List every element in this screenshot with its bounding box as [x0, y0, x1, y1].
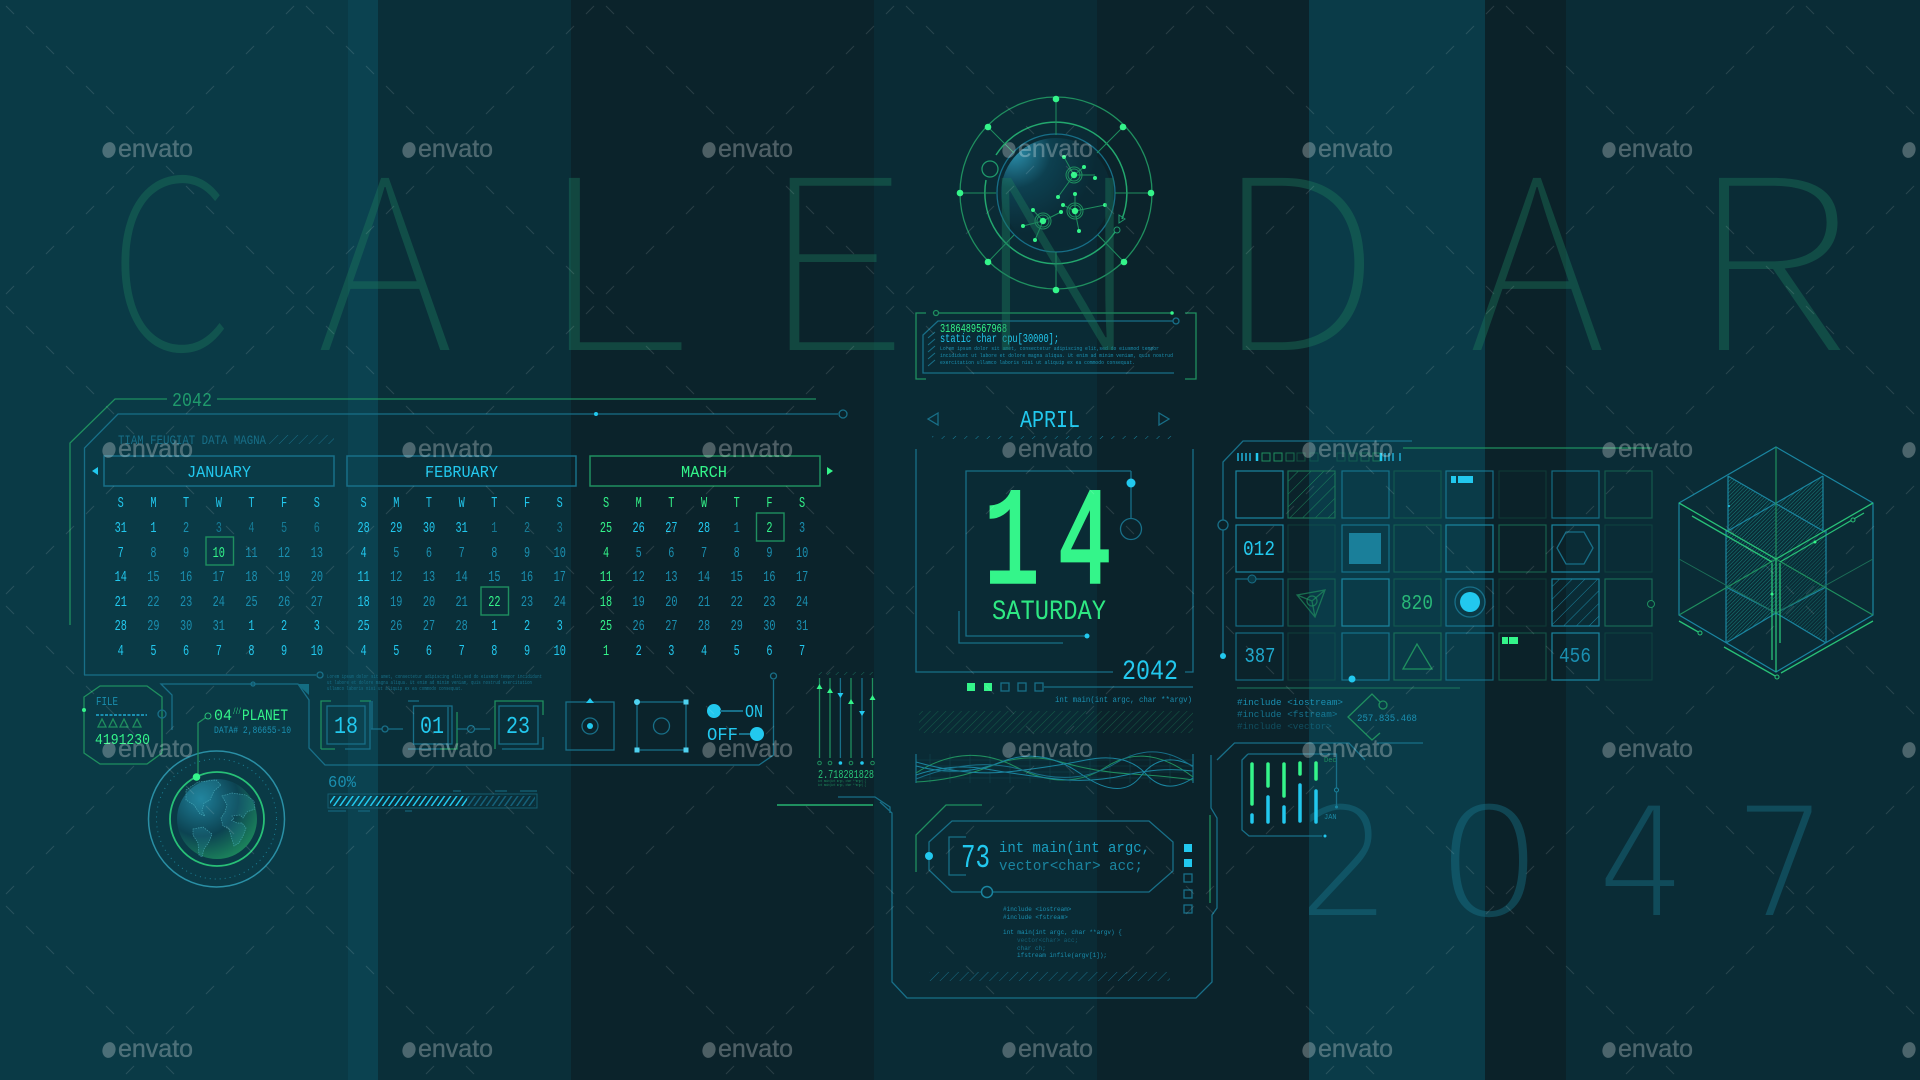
- month grid: March: 22: [731, 593, 743, 611]
- month grid: March: W: [701, 494, 707, 512]
- month grid: January: 29: [147, 617, 160, 635]
- month grid: March: [600, 494, 808, 660]
- code box: exercitation ullamco laboris nisi ut aliquip ex ea commodo consequat.: [940, 359, 1135, 366]
- month grid: February: 4: [361, 642, 367, 660]
- watermarks: envato: [1618, 1035, 1693, 1063]
- month grid: January: 26: [278, 593, 290, 611]
- month grid: March: S: [603, 494, 609, 512]
- watermarks: envato: [418, 135, 493, 163]
- watermarks: envato: [1618, 435, 1693, 463]
- watermarks: envato: [118, 135, 193, 163]
- calendar frame lines: [70, 399, 847, 678]
- month grid: February: 1: [491, 519, 498, 537]
- month grid: February: 28: [357, 519, 370, 537]
- on off toggles: [707, 703, 764, 746]
- month grid: February: 6: [426, 642, 432, 660]
- cube edges: [1679, 447, 1873, 672]
- month grid: March: 27: [665, 519, 678, 537]
- month grid: February: 7: [459, 544, 465, 562]
- watermarks: envato: [118, 1035, 193, 1063]
- month grid: January: 24: [213, 593, 225, 611]
- radar spokes and nodes: [957, 96, 1154, 293]
- counter 23: [495, 701, 543, 749]
- counter 01: [408, 701, 457, 749]
- on off toggles: OFF: [707, 726, 738, 746]
- month grid: March: 27: [665, 617, 678, 635]
- code box: incididunt ut labore et dolore magna aliqua. Ut enim ad minim veniam, quis nostrud: [940, 352, 1173, 359]
- month grid: February: 24: [554, 593, 566, 611]
- title: CALENDAR: L: [536, 75, 688, 419]
- month headers: [104, 456, 820, 486]
- weekday: SATURDAY: [992, 597, 1106, 628]
- month grid: March: M: [636, 494, 642, 512]
- vertical sliders: int main(int argc, char **argv) {: [818, 783, 866, 788]
- month grid: January: 25: [245, 593, 258, 611]
- grid icons: [1248, 476, 1654, 682]
- grid numbers: 012: [1243, 539, 1275, 562]
- month grid: January: T: [248, 494, 255, 512]
- month grid: January: S: [314, 494, 320, 512]
- month grid: March: 15: [731, 568, 743, 586]
- control strip frame: [161, 673, 776, 765]
- month headers: MARCH: [681, 464, 727, 483]
- month grid: March: 2: [766, 519, 773, 537]
- month grid: January: S: [118, 494, 124, 512]
- month grid: February: 12: [390, 568, 402, 586]
- ticker: [1238, 453, 1400, 461]
- watermarks: envato: [1018, 435, 1093, 463]
- progress bar: 60%: [328, 774, 357, 793]
- counter 18: [321, 701, 371, 749]
- title: CALENDAR: A: [1470, 75, 1604, 418]
- continents: [186, 780, 255, 857]
- month grid: March: 5: [734, 642, 740, 660]
- month grid: January: 31: [213, 617, 225, 635]
- target square 1: [566, 698, 614, 750]
- grid numbers: 820: [1401, 593, 1433, 616]
- month grid: February: 25: [357, 617, 370, 635]
- waveform: [916, 752, 1193, 789]
- counter 01: 01: [420, 714, 444, 741]
- watermarks: envato: [118, 735, 193, 763]
- month grid: January: 18: [245, 568, 258, 586]
- month grid: February: 19: [390, 593, 402, 611]
- month grid: March: 4: [603, 544, 609, 562]
- month grid: February: 10: [554, 642, 566, 660]
- accent line: [916, 805, 982, 872]
- month grid: January: T: [183, 494, 189, 512]
- watermarks: envato: [1018, 1035, 1093, 1063]
- title: CALENDAR: N: [976, 75, 1139, 418]
- month grid: February: 16: [521, 568, 533, 586]
- month grid: February: 20: [423, 593, 435, 611]
- month grid: March: 24: [796, 593, 808, 611]
- month grid: January: 20: [311, 568, 323, 586]
- month grid: January: 5: [150, 642, 156, 660]
- month grid: January: 2: [281, 617, 287, 635]
- month grid: February: 5: [393, 642, 399, 660]
- watermarks: envato: [1318, 1035, 1393, 1063]
- title: CALENDAR: D: [1215, 75, 1379, 418]
- month grid: February: 21: [456, 593, 468, 611]
- diamond readout: [1348, 694, 1417, 740]
- include lines: [1237, 697, 1343, 732]
- month grid: January: 22: [147, 593, 160, 611]
- grid panel: [1218, 441, 1654, 740]
- month grid: February: 17: [554, 568, 566, 586]
- month grid: February: 23: [521, 593, 533, 611]
- watermarks: envato: [1018, 735, 1093, 763]
- month grid: March: T: [668, 494, 675, 512]
- octagon: [925, 821, 1173, 898]
- month grid: January: 10: [213, 544, 225, 562]
- month grid: February: M: [393, 494, 399, 512]
- month arrows: [92, 467, 833, 475]
- month grid: March: 20: [665, 593, 678, 611]
- vertical sliders: 2.718281828: [818, 768, 874, 782]
- month grid: February: 9: [524, 642, 530, 660]
- month grid: February: 22: [488, 593, 500, 611]
- title: 2047: 0: [1436, 776, 1543, 951]
- planet label: DATA# 2,86655-10: [214, 726, 291, 737]
- month grid: February: 2: [524, 617, 530, 635]
- left connectors: [777, 804, 873, 806]
- month grid: March: S: [799, 494, 805, 512]
- code box: 3186489567968: [940, 322, 1007, 336]
- month grid: January: 11: [245, 544, 258, 562]
- month grid: March: 5: [636, 544, 642, 562]
- watermarks: envato: [1618, 735, 1693, 763]
- watermarks: envato: [1018, 135, 1093, 163]
- month grid: March: 6: [766, 642, 773, 660]
- month grid: February: T: [491, 494, 498, 512]
- month grid: January: 28: [115, 617, 127, 635]
- slider labels: JAN: [1324, 814, 1337, 822]
- top connector: [838, 797, 890, 813]
- code listing: #include <iostream>: [1003, 906, 1072, 913]
- month grid: February: 28: [456, 617, 468, 635]
- month grid: February: 9: [524, 544, 530, 562]
- month grid: March: 8: [734, 544, 740, 562]
- big day number: 1: [984, 469, 1039, 624]
- highlighted dates: [206, 513, 784, 615]
- month grid: March: T: [734, 494, 740, 512]
- month grid: March: 13: [665, 568, 678, 586]
- lorem text block: [327, 674, 542, 692]
- grid cells: [1236, 471, 1652, 680]
- month grid: February: 6: [426, 544, 432, 562]
- octagon: 73: [961, 840, 990, 877]
- month grid: March: 18: [600, 593, 612, 611]
- month grid: February: 3: [557, 617, 563, 635]
- file widget: 4191230: [95, 732, 150, 749]
- month headers: FEBRUARY: [425, 464, 498, 483]
- month grid: March: 28: [698, 519, 710, 537]
- title: 2047: 2: [1299, 776, 1391, 951]
- code listing: vector<char> acc;: [1017, 937, 1078, 944]
- include lines: #include <fstream>: [1237, 709, 1338, 720]
- month grid: January: W: [216, 494, 222, 512]
- title: CALENDAR: A: [318, 75, 452, 418]
- planet label: 04: [214, 707, 232, 725]
- watermarks: envato: [718, 1035, 793, 1063]
- title: 2047: [1299, 776, 1828, 951]
- vertical sliders: int main(int argc, char **argv) {: [818, 779, 866, 784]
- watermarks: [118, 135, 1693, 1063]
- code listing: char ch;: [1017, 945, 1046, 952]
- month grid: January: 30: [180, 617, 192, 635]
- month grid: March: 29: [731, 617, 743, 635]
- month grid: February: 8: [491, 544, 497, 562]
- month grid: March: 1: [734, 519, 740, 537]
- planet label: [214, 707, 291, 737]
- month grid: January: M: [150, 494, 156, 512]
- month grid: February: 26: [390, 617, 402, 635]
- month grid: February: 15: [488, 568, 500, 586]
- month grid: January: 2: [183, 519, 189, 537]
- code listing: int main(int argc, char **argv) {: [1003, 929, 1122, 936]
- month grid: February: 30: [423, 519, 435, 537]
- month grid: January: 15: [147, 568, 160, 586]
- month grid: March: 25: [600, 519, 612, 537]
- code listing: ifstream infile(argv[1]);: [1017, 952, 1107, 959]
- title: 2047: 7: [1735, 776, 1828, 951]
- month grid: January: 21: [115, 593, 127, 611]
- cube hatching: [1726, 476, 1826, 643]
- month grid: January: 9: [281, 642, 287, 660]
- month grid: March: 7: [701, 544, 707, 562]
- diamond readout: 257.835.468: [1357, 714, 1417, 725]
- date frame: [916, 449, 1193, 672]
- month grid: January: 14: [115, 568, 127, 586]
- month grid: January: 4: [118, 642, 124, 660]
- month grid: March: 3: [799, 519, 805, 537]
- month grid: February: F: [524, 494, 530, 512]
- month grid: February: 5: [393, 544, 399, 562]
- counter 23: 23: [506, 714, 530, 741]
- month grid: January: 16: [180, 568, 192, 586]
- month grid: January: [115, 494, 323, 660]
- globe sphere: [1001, 138, 1111, 248]
- month grid: January: 6: [183, 642, 189, 660]
- subtitle: TIAM FEUGIAT DATA MAGNA: [118, 433, 266, 448]
- isometric cube: [1679, 447, 1873, 679]
- watermarks: envato: [718, 735, 793, 763]
- lorem text block: Lorem ipsum dolor sit amet, consectetur adipiscing elit,sed do eiusmod tempor incididunt: [327, 674, 542, 680]
- month grid: March: 26: [633, 617, 645, 635]
- code listing: #include <fstream>: [1003, 914, 1068, 921]
- month grid: February: 18: [357, 593, 370, 611]
- month grid: March: 31: [796, 617, 808, 635]
- month grid: February: W: [459, 494, 465, 512]
- month grid: February: 3: [557, 519, 563, 537]
- month grid: February: 29: [390, 519, 402, 537]
- title: CALENDAR: E: [761, 75, 908, 418]
- counter 18: 18: [334, 714, 358, 741]
- month grid: March: 7: [799, 642, 805, 660]
- side accent: [1209, 815, 1211, 903]
- month grid: March: 19: [633, 593, 645, 611]
- month grid: February: S: [557, 494, 563, 512]
- month selector: APRIL: [1020, 408, 1080, 435]
- month grid: January: 8: [150, 544, 156, 562]
- month grid: February: 2: [524, 519, 530, 537]
- subtitle hatch: [269, 435, 334, 444]
- month grid: February: 8: [491, 642, 497, 660]
- month grid: January: 5: [281, 519, 287, 537]
- month grid: January: 8: [248, 642, 255, 660]
- month grid: March: 1: [603, 642, 609, 660]
- square indicators: [1184, 844, 1192, 913]
- month grid: February: 7: [459, 642, 465, 660]
- title: CALENDAR: R: [1689, 75, 1850, 419]
- target square 2: [634, 699, 688, 752]
- month grid: March: F: [766, 494, 773, 512]
- octagon: int main(int argc,: [999, 841, 1150, 857]
- on off toggles: ON: [745, 703, 763, 723]
- slider bars: [1252, 763, 1316, 822]
- month grid: March: 16: [763, 568, 776, 586]
- month grid: January: F: [281, 494, 287, 512]
- month grid: January: 17: [213, 568, 225, 586]
- code box: static char cpu[30000];: [940, 332, 1059, 346]
- slider labels: [1324, 757, 1337, 822]
- file widget: FILE: [96, 695, 118, 709]
- progress bar: [328, 774, 537, 811]
- month grid: January: 4: [248, 519, 255, 537]
- month grid: February: [357, 494, 566, 660]
- octagon: vector<char> acc;: [999, 859, 1143, 875]
- file widget: [82, 686, 166, 764]
- grid frame: [1218, 441, 1652, 659]
- month grid: January: 3: [314, 617, 320, 635]
- year: 2042: [1122, 657, 1178, 688]
- month grid: March: 10: [796, 544, 808, 562]
- watermarks: envato: [1618, 135, 1693, 163]
- grid numbers: 387: [1244, 646, 1276, 669]
- month grid: February: 27: [423, 617, 435, 635]
- bottom hatch: [929, 972, 1170, 981]
- month grid: March: 3: [668, 642, 674, 660]
- month grid: March: 11: [600, 568, 612, 586]
- month grid: March: 9: [766, 544, 773, 562]
- radar rings: [960, 97, 1152, 289]
- watermarks: envato: [418, 435, 493, 463]
- month grid: March: 4: [701, 642, 707, 660]
- title: CALENDAR: C: [109, 76, 233, 419]
- signature line: int main(int argc, char **argv): [1055, 696, 1192, 705]
- watermarks: envato: [418, 735, 493, 763]
- slider panel: [1217, 743, 1423, 838]
- month grid: March: 25: [600, 617, 612, 635]
- month grid: January: 27: [311, 593, 323, 611]
- page squares: [967, 683, 1193, 691]
- grid numbers: [1243, 539, 1591, 669]
- date panel: [916, 408, 1193, 789]
- month grid: March: 30: [763, 617, 776, 635]
- slider labels: Dec: [1324, 757, 1337, 765]
- month grid: January: 7: [118, 544, 124, 562]
- month grid: March: 26: [633, 519, 645, 537]
- code listing: [1003, 906, 1122, 959]
- month grid: January: 13: [311, 544, 323, 562]
- vertical sliders: [816, 672, 876, 788]
- month selector: [928, 408, 1175, 439]
- year label: 2042: [172, 390, 212, 412]
- month grid: January: 6: [314, 519, 320, 537]
- connectors: [371, 701, 490, 732]
- month grid: March: 21: [698, 593, 710, 611]
- include lines: #include <vector>: [1237, 721, 1332, 732]
- month grid: February: 4: [361, 544, 367, 562]
- month grid: March: 23: [763, 593, 776, 611]
- month grid: February: 10: [554, 544, 566, 562]
- month grid: March: 28: [698, 617, 710, 635]
- title: 2047: 4: [1599, 776, 1685, 951]
- code octagon panel: [777, 755, 1217, 998]
- outer frame: [880, 755, 1217, 998]
- lorem text block: ut labore et dolore magna aliqua. Ut enim ad minim veniam, quis nostrud exercitation: [327, 680, 532, 686]
- watermarks: envato: [718, 435, 793, 463]
- watermarks: envato: [1318, 435, 1393, 463]
- code box: Lorem ipsum dolor sit amet, consectetur adipiscing elit,sed do eiusmod tempor: [940, 345, 1159, 352]
- month grid: January: 12: [278, 544, 290, 562]
- hatch band: [919, 711, 1193, 733]
- watermarks: envato: [718, 135, 793, 163]
- title: CALENDAR: [109, 75, 1850, 419]
- watermarks: envato: [118, 435, 193, 463]
- month grid: January: 31: [115, 519, 127, 537]
- month grid: February: T: [426, 494, 432, 512]
- month grid: February: 31: [456, 519, 468, 537]
- month grid: February: 1: [491, 617, 498, 635]
- month grid: January: 19: [278, 568, 290, 586]
- big day number: 4: [1057, 469, 1112, 624]
- month grid: January: 10: [311, 642, 323, 660]
- month grid: March: 17: [796, 568, 808, 586]
- radar globe: [957, 96, 1154, 293]
- grid numbers: 456: [1559, 646, 1591, 669]
- planet globe: [148, 713, 284, 887]
- calendar panel: [70, 390, 847, 692]
- month grid: March: 2: [636, 642, 642, 660]
- month headers: JANUARY: [187, 464, 251, 483]
- month grid: March: 6: [668, 544, 674, 562]
- month grid: January: 3: [216, 519, 222, 537]
- month grid: January: 7: [216, 642, 222, 660]
- watermarks: envato: [1318, 135, 1393, 163]
- month grid: March: 12: [633, 568, 645, 586]
- watermarks: envato: [1318, 735, 1393, 763]
- month grid: January: 1: [248, 617, 255, 635]
- month grid: February: 14: [456, 568, 468, 586]
- watermarks: envato: [418, 1035, 493, 1063]
- code box: [916, 310, 1196, 379]
- date counters: [321, 701, 543, 749]
- month grid: January: 23: [180, 593, 192, 611]
- planet label: PLANET: [242, 707, 288, 725]
- lorem text block: ullamco laboris nisi ut aliquip ex ea commodo consequat.: [327, 686, 463, 692]
- month grid: February: S: [361, 494, 367, 512]
- month grid: February: 13: [423, 568, 435, 586]
- month grid: February: 11: [357, 568, 370, 586]
- include lines: #include <iostream>: [1237, 697, 1343, 708]
- month grid: January: 1: [150, 519, 157, 537]
- planet label: ///: [233, 707, 241, 717]
- month grid: March: 14: [698, 568, 710, 586]
- month grid: January: 9: [183, 544, 189, 562]
